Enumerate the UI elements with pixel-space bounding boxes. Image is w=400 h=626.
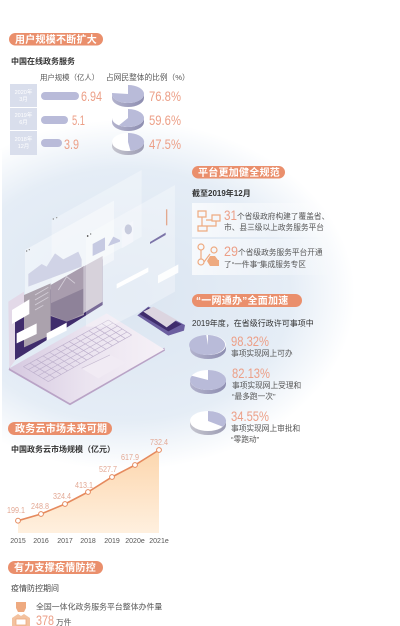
year column: 2019年	[15, 111, 33, 119]
icon: person at laptop	[12, 602, 30, 626]
stat: 98.32%: 事项实现网上可办	[231, 348, 293, 358]
percent values: 59.6%	[149, 112, 181, 128]
bar chart: users: 5.1	[72, 112, 85, 128]
middle window	[25, 201, 114, 310]
stat: 3.78 million: 全国一体化政务服务平台整体办件量	[36, 602, 162, 612]
stat: 98.32%	[231, 333, 293, 358]
laptop base	[9, 313, 165, 405]
heading: user scale: 用户规模不断扩大	[15, 33, 97, 46]
stat: 34.55%: 34.55%	[231, 408, 269, 424]
bar chart: users: 3.9	[64, 136, 79, 152]
line chart: market size: 732.4	[150, 438, 168, 447]
line chart: market size: 2015	[10, 538, 26, 545]
pie: 47.5%	[112, 133, 144, 155]
year column: 6月	[19, 119, 28, 126]
stat: 34.55%: 事项实现网上审批和	[231, 423, 300, 433]
stat: 3.78 million	[36, 602, 162, 626]
stat: 34.55%: “零跑动”	[231, 434, 260, 444]
heading: platform standards: 平台更加健全规范	[198, 166, 280, 179]
card: 29 platforms: 29	[224, 243, 238, 259]
line chart: market size: 2021e	[149, 538, 169, 545]
subtitle: during pandemic: 疫情防控期间	[11, 583, 59, 593]
line chart: market size: 2016	[33, 538, 49, 545]
panel: one network service	[189, 294, 314, 444]
laptop screen	[8, 256, 103, 368]
card: 29 platforms: 了“一件事”集成服务专区	[224, 259, 306, 269]
line chart: market size: 617.9	[121, 453, 139, 462]
card: 29 platforms: 个省级政务服务平台开通	[238, 247, 323, 257]
line chart: market size: 2020e	[125, 538, 145, 545]
subtitle: online gov services: 中国在线政务服务	[11, 56, 75, 66]
line chart: market size: 2018	[80, 538, 96, 545]
column headers: 用户规模（亿人）	[40, 73, 99, 82]
year column: 2020年	[15, 88, 33, 96]
line chart: market size: 248.8	[31, 502, 49, 511]
illustration: laptop with floating windows	[8, 170, 185, 405]
line chart: market size: 2019	[104, 538, 120, 545]
column headers	[40, 72, 190, 82]
stat: 98.32%: 98.32%	[231, 333, 269, 349]
stat: 34.55%	[231, 408, 300, 444]
year column: 2018年	[15, 135, 33, 143]
bar chart: users: 6.94	[81, 88, 102, 104]
column headers: 占网民整体的比例（%）	[106, 72, 190, 82]
pie: 34.55%	[190, 411, 226, 435]
panel: platform standards	[192, 166, 342, 275]
line chart: market size	[7, 438, 169, 545]
heading: pandemic support: 有力支撑疫情防控	[14, 561, 96, 574]
panel: gov cloud market	[7, 422, 169, 545]
front window	[86, 185, 178, 327]
pie: 59.6%	[112, 109, 144, 131]
panel: user scale	[9, 33, 190, 155]
back window	[52, 170, 142, 287]
line chart: market size: 324.4	[53, 492, 71, 501]
pie: 98.32%	[189, 335, 226, 359]
stat: 82.13%: 事项实现网上受理和	[232, 380, 301, 390]
card: 29 platforms	[192, 239, 342, 275]
phone	[137, 307, 185, 336]
card: 31 provinces: 31	[224, 207, 237, 223]
card: 31 provinces	[192, 203, 342, 237]
card: 31 provinces: 个省级政府构建了覆盖省、	[237, 211, 329, 221]
stat: 82.13%: “最多跑一次”	[232, 391, 276, 401]
year column: 12月	[18, 143, 29, 150]
heading: gov cloud: 政务云市场未来可期	[15, 422, 107, 435]
stat: 82.13%	[232, 365, 301, 401]
date label: 截至2019年12月	[192, 188, 251, 198]
line chart: market size: 413.1	[75, 481, 93, 490]
line chart: market size: 199.1	[7, 506, 25, 515]
percent values: 76.8%	[149, 88, 181, 104]
bar chart: users	[41, 88, 102, 152]
subtitle: cloud market size: 中国政务云市场规模（亿元）	[11, 444, 115, 454]
year column	[10, 84, 37, 155]
line chart: market size: 527.7	[99, 465, 117, 474]
heading: one network: “一网通办”全面加速	[196, 294, 288, 307]
panel: pandemic support	[8, 561, 162, 626]
percent values	[149, 88, 181, 152]
stat: 82.13%: 82.13%	[232, 365, 270, 381]
line chart: market size: 2017	[57, 538, 73, 545]
card: 31 provinces: 市、县三级以上政务服务平台	[224, 222, 324, 232]
pie: 76.8%	[112, 85, 144, 107]
year column: 3月	[19, 96, 28, 103]
percent values: 47.5%	[149, 136, 181, 152]
pie: 82.13%	[190, 370, 226, 394]
subtitle: 2019年度，在省级行政许可事项中	[192, 318, 314, 328]
